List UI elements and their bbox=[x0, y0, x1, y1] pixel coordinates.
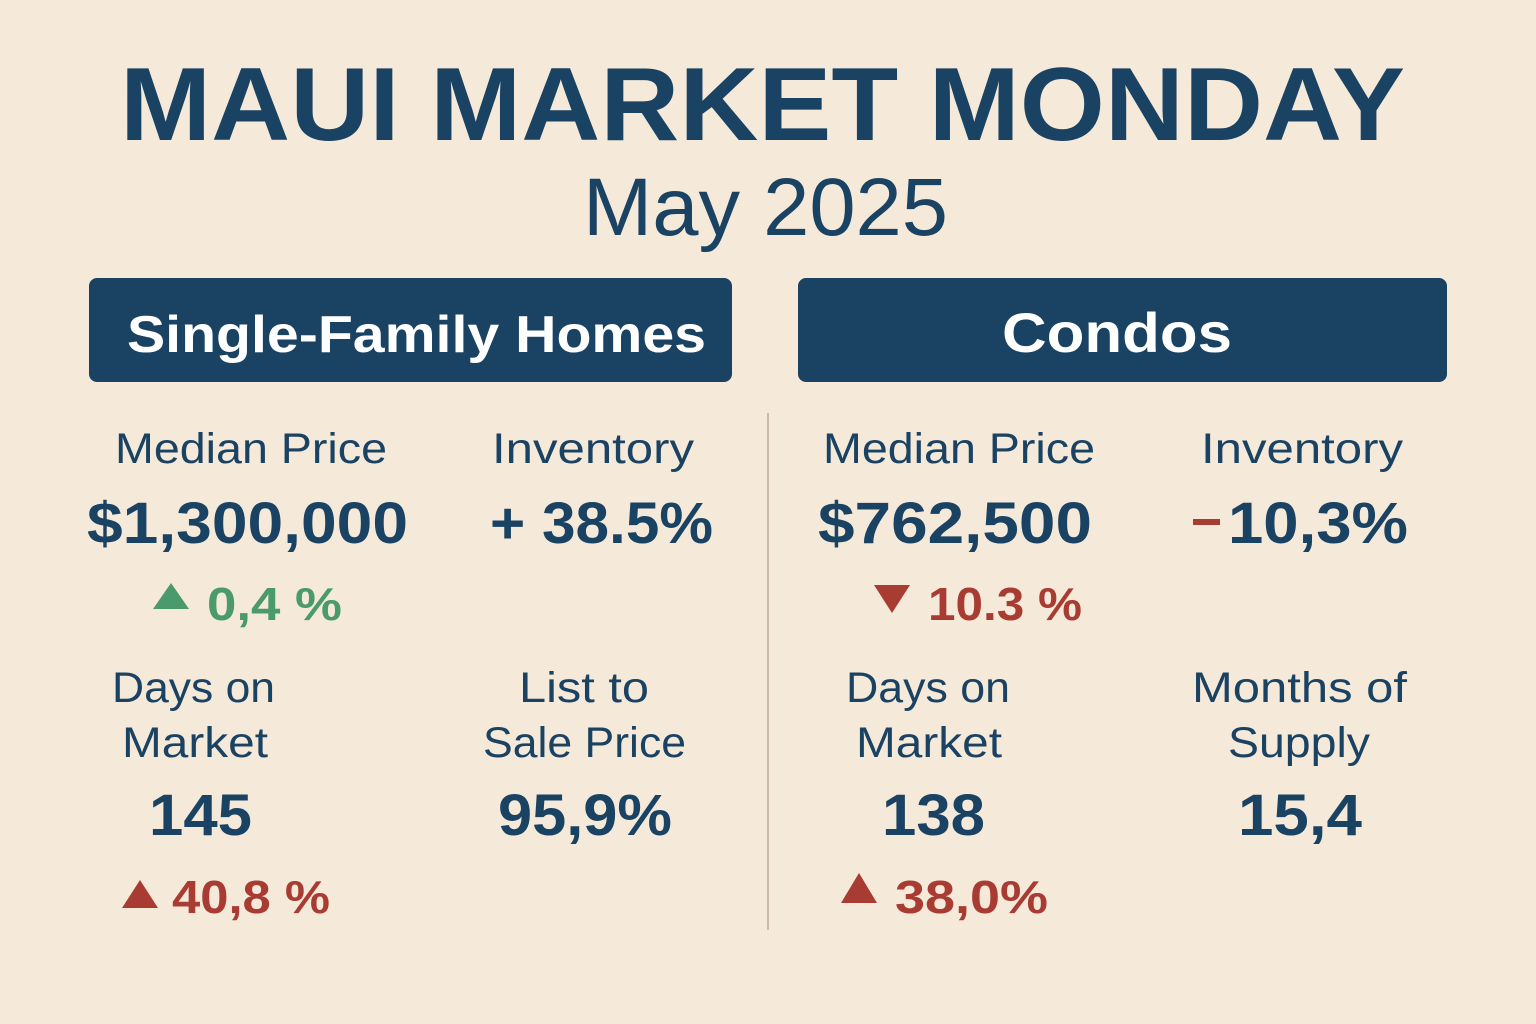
stat: condo median price: $762,500 bbox=[818, 491, 1092, 556]
stat: SF inventory bbox=[490, 425, 713, 556]
stat: SF days on market: 40,8 % bbox=[172, 871, 330, 923]
stat: condo inventory: Inventory bbox=[1201, 425, 1404, 473]
stat: condo inventory bbox=[1193, 425, 1408, 556]
stat: condo months of supply: Months of bbox=[1192, 664, 1408, 712]
header: single-family homes bbox=[89, 278, 732, 382]
stat: SF days on market: 145 bbox=[149, 783, 252, 848]
stat: SF inventory: Inventory bbox=[492, 425, 695, 473]
stat: SF days on market: Market bbox=[122, 719, 268, 767]
stat: condo months of supply bbox=[1192, 664, 1408, 848]
stat: SF list to sale: Sale Price bbox=[483, 719, 686, 767]
stat: SF inventory: + 38.5% bbox=[490, 491, 713, 556]
stat: SF median price: $1,300,000 bbox=[87, 491, 408, 556]
stat: condo days on market: 138 bbox=[882, 783, 985, 848]
stat: SF median price: Median Price bbox=[115, 425, 387, 473]
stat: condo days on market: Market bbox=[856, 719, 1002, 767]
stat: SF list to sale: List to bbox=[519, 664, 649, 712]
stat: SF list to sale: 95,9% bbox=[498, 783, 672, 848]
stat: SF list to sale bbox=[483, 664, 686, 848]
header: single-family homes: Single-Family Homes bbox=[127, 306, 706, 364]
header: condos: Condos bbox=[1002, 301, 1232, 364]
stat: condo inventory: 10,3% bbox=[1228, 491, 1408, 556]
stat: SF days on market: Days on bbox=[112, 664, 275, 712]
stat: condo median price: 10.3 % bbox=[928, 578, 1082, 630]
stat: SF median price bbox=[87, 425, 408, 630]
stat: condo days on market: 38,0% bbox=[895, 871, 1048, 923]
stat: SF median price: 0,4 % bbox=[207, 578, 342, 630]
stat: condo median price: Median Price bbox=[823, 425, 1095, 473]
stat: condo median price bbox=[818, 425, 1095, 630]
stat: SF days on market bbox=[112, 664, 330, 923]
header: condos bbox=[798, 278, 1447, 382]
stat: condo days on market: Days on bbox=[846, 664, 1010, 712]
stat: condo months of supply: Supply bbox=[1228, 719, 1371, 767]
stat: condo months of supply: 15,4 bbox=[1238, 783, 1362, 848]
panel: single-family stats bbox=[87, 425, 713, 923]
panel: condo stats bbox=[818, 425, 1408, 923]
title: MAUI MARKET MONDAY bbox=[120, 47, 1405, 163]
subtitle: date: May 2025 bbox=[583, 162, 948, 253]
stat: condo days on market bbox=[841, 664, 1048, 923]
